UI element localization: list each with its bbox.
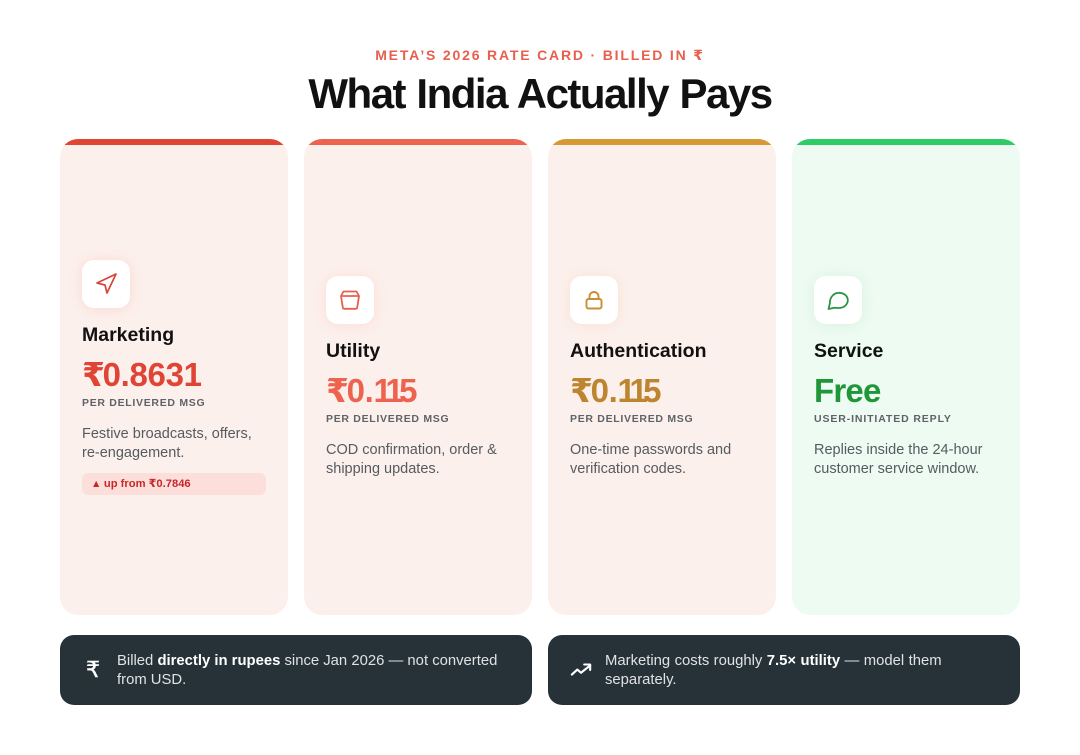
description: authentication: One-time passwords and: [570, 442, 731, 458]
unit: utility: PER DELIVERED MSG: [326, 413, 449, 425]
callout: marketing vs utility: [548, 635, 1020, 705]
description: service: Replies inside the 24-hour: [814, 442, 982, 458]
icon: chat bubble: [814, 276, 862, 324]
description: authentication: verification codes.: [570, 461, 686, 477]
callout text: marketing ratio: [605, 653, 942, 688]
badge: price increase: ▲ up from ₹0.7846: [91, 478, 191, 490]
description: utility: [326, 442, 497, 477]
price: marketing: ₹0.8631: [82, 356, 202, 393]
title: What India Actually Pays: [308, 70, 772, 117]
icon: lock: [570, 276, 618, 324]
icon: rupee: ₹: [86, 657, 100, 682]
description: utility: shipping updates.: [326, 461, 440, 477]
icon: navigation arrow: [82, 260, 130, 308]
description: service: [814, 442, 982, 477]
description: marketing: [82, 426, 252, 461]
heading: utility: Utility: [326, 340, 380, 362]
unit: marketing: PER DELIVERED MSG: [82, 397, 205, 409]
eyebrow: META’S 2026 RATE CARD · BILLED IN ₹: [375, 47, 705, 63]
callout text: rupees: from USD.: [117, 672, 186, 688]
price: service: Free: [814, 372, 881, 409]
icon: box: [326, 276, 374, 324]
panel: service: [792, 139, 1020, 615]
description: marketing: re-engagement.: [82, 445, 184, 461]
badge: price increase: [82, 473, 266, 495]
description: utility: COD confirmation, order &: [326, 442, 497, 458]
callout text: marketing ratio: Marketing costs roughly 7.5× utility — model them: [605, 653, 942, 669]
callout text: marketing ratio: separately.: [605, 672, 677, 688]
callout text: rupees: Billed directly in rupees since Jan 2026 — not converted: [117, 653, 497, 669]
description: service: customer service window.: [814, 461, 979, 477]
panel: utility: [304, 139, 532, 615]
heading: marketing: Marketing: [82, 324, 174, 346]
description: marketing: Festive broadcasts, offers,: [82, 426, 252, 442]
callout text: rupees: [117, 653, 497, 688]
panel: authentication: [548, 139, 776, 615]
heading: service: Service: [814, 340, 883, 362]
price: utility: ₹0.115: [326, 372, 417, 409]
icon: trend arrow: [570, 664, 592, 676]
price: authentication: ₹0.115: [570, 372, 661, 409]
unit: authentication: PER DELIVERED MSG: [570, 413, 693, 425]
description: authentication: [570, 442, 731, 477]
panel: marketing: [60, 139, 288, 615]
heading: authentication: Authentication: [570, 340, 706, 362]
unit: service: USER-INITIATED REPLY: [814, 413, 952, 425]
callout: billed in rupees: [60, 635, 532, 705]
